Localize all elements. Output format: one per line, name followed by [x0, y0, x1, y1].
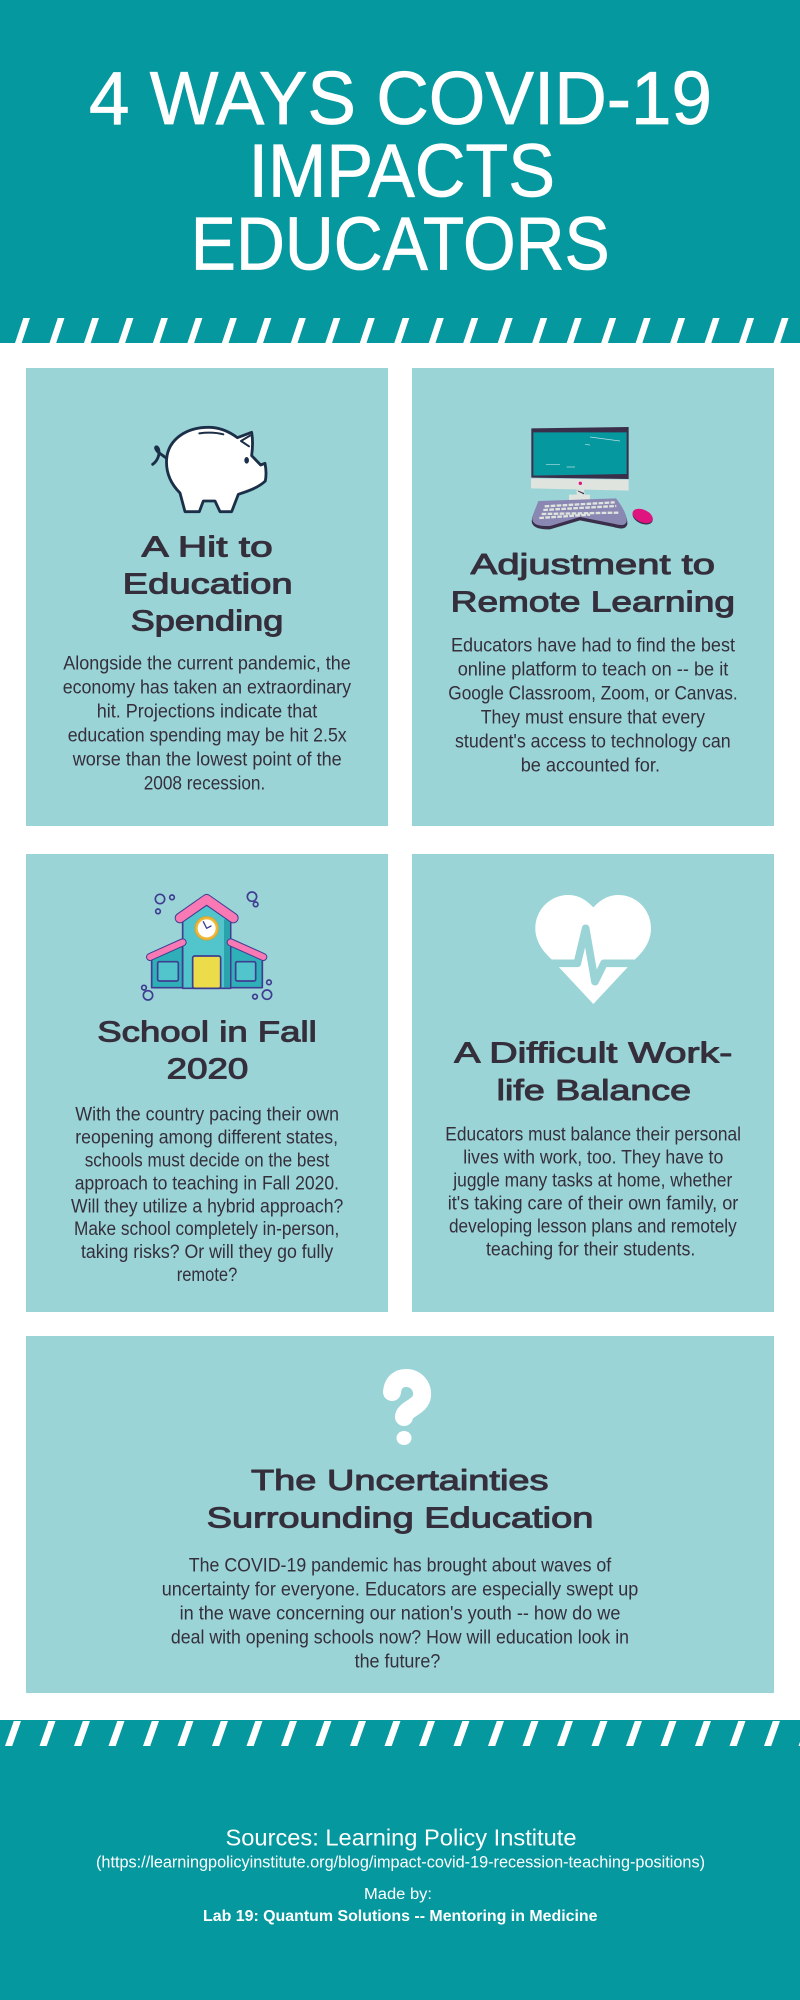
icon: desktop computer [531, 427, 655, 529]
heading [451, 549, 735, 619]
body text: Educators have had to find the best [451, 635, 736, 656]
body text: online platform to teach on -- be it [458, 659, 729, 680]
body text: uncertainty for everyone. Educators are especially swept up [162, 1579, 638, 1600]
body text: economy has taken an extraordinary [63, 677, 351, 698]
icon: piggy bank [153, 427, 266, 512]
body text: developing lesson plans and remotely [449, 1216, 737, 1237]
sources and credits: Lab 19: Quantum Solutions -- Mentoring in Medicine [203, 1908, 598, 1925]
heading: School in Fall [97, 1017, 317, 1049]
body text: hit. Projections indicate that [97, 701, 318, 722]
body text: The COVID-19 pandemic has brought about waves of [189, 1555, 612, 1576]
body text: remote? [177, 1265, 237, 1286]
heading: 2020 [167, 1053, 248, 1085]
sources and credits: Sources: Learning Policy Institute [226, 1825, 576, 1851]
body text: education spending may be hit 2.5x [68, 725, 347, 746]
body text [63, 653, 351, 794]
title: EDUCATORS [191, 201, 610, 285]
body text: deal with opening schools now? How will education look in [171, 1627, 629, 1648]
heading: A Hit to [142, 532, 273, 564]
body text: juggle many tasks at home, whether [452, 1170, 733, 1191]
heading [97, 1017, 317, 1085]
heading: A Difficult Work- [454, 1038, 732, 1070]
body text: it's taking care of their own family, or [448, 1193, 739, 1214]
body text: worse than the lowest point of the [72, 749, 342, 770]
heading: Spending [131, 606, 283, 638]
body text [162, 1555, 638, 1672]
heading: Surrounding Education [207, 1502, 593, 1534]
body text: taking risks? Or will they go fully [81, 1242, 334, 1263]
body text: Educators must balance their personal [445, 1124, 741, 1145]
panel: adjustment to remote learning [412, 368, 774, 826]
icon: heart with pulse [535, 895, 651, 1004]
icon: question mark [392, 1378, 422, 1445]
body text: the future? [355, 1651, 440, 1672]
body text: Alongside the current pandemic, the [63, 653, 351, 674]
body text: be accounted for. [521, 755, 660, 776]
title: 4 WAYS COVID-19 [89, 56, 712, 140]
heading: Remote Learning [451, 587, 735, 619]
body text: approach to teaching in Fall 2020. [75, 1173, 339, 1194]
body text [71, 1105, 343, 1286]
footer band [0, 1720, 800, 2000]
panel: school in fall 2020 [26, 854, 388, 1312]
body text: lives with work, too. They have to [463, 1147, 723, 1168]
body text: Google Classroom, Zoom, or Canvas. [448, 683, 738, 704]
icon: school building [142, 892, 272, 1000]
body text: student's access to technology can [455, 731, 731, 752]
body text: Make school completely in-person, [74, 1219, 339, 1240]
panel: a hit to education spending [26, 368, 388, 826]
panel: the uncertainties surrounding education [26, 1336, 774, 1693]
body text: schools must decide on the best [85, 1150, 330, 1172]
body text [448, 635, 738, 776]
body text: in the wave concerning our nation's youth -- how do we [180, 1603, 620, 1624]
body text: teaching for their students. [486, 1239, 695, 1260]
body text: With the country pacing their own [75, 1105, 339, 1126]
body text: 2008 recession. [144, 773, 265, 794]
body text: reopening among different states, [75, 1128, 338, 1149]
body text: They must ensure that every [481, 707, 705, 728]
title: IMPACTS [248, 129, 555, 213]
heading: Education [123, 568, 293, 600]
heading [454, 1038, 732, 1107]
heading: life Balance [497, 1075, 691, 1107]
body text: Will they utilize a hybrid approach? [71, 1196, 343, 1217]
heading: Adjustment to [471, 549, 715, 581]
heading [207, 1465, 593, 1534]
sources and credits: (https://learningpolicyinstitute.org/blog/impact-covid-19-recession-teaching-positions) [96, 1854, 705, 1872]
sources and credits [96, 1825, 705, 1925]
body text [445, 1124, 741, 1260]
heading: The Uncertainties [251, 1465, 548, 1497]
sources and credits: Made by: [364, 1886, 432, 1903]
title [89, 56, 712, 285]
panel: a difficult work-life balance [412, 854, 774, 1312]
header band [0, 0, 800, 343]
heading [123, 532, 293, 638]
